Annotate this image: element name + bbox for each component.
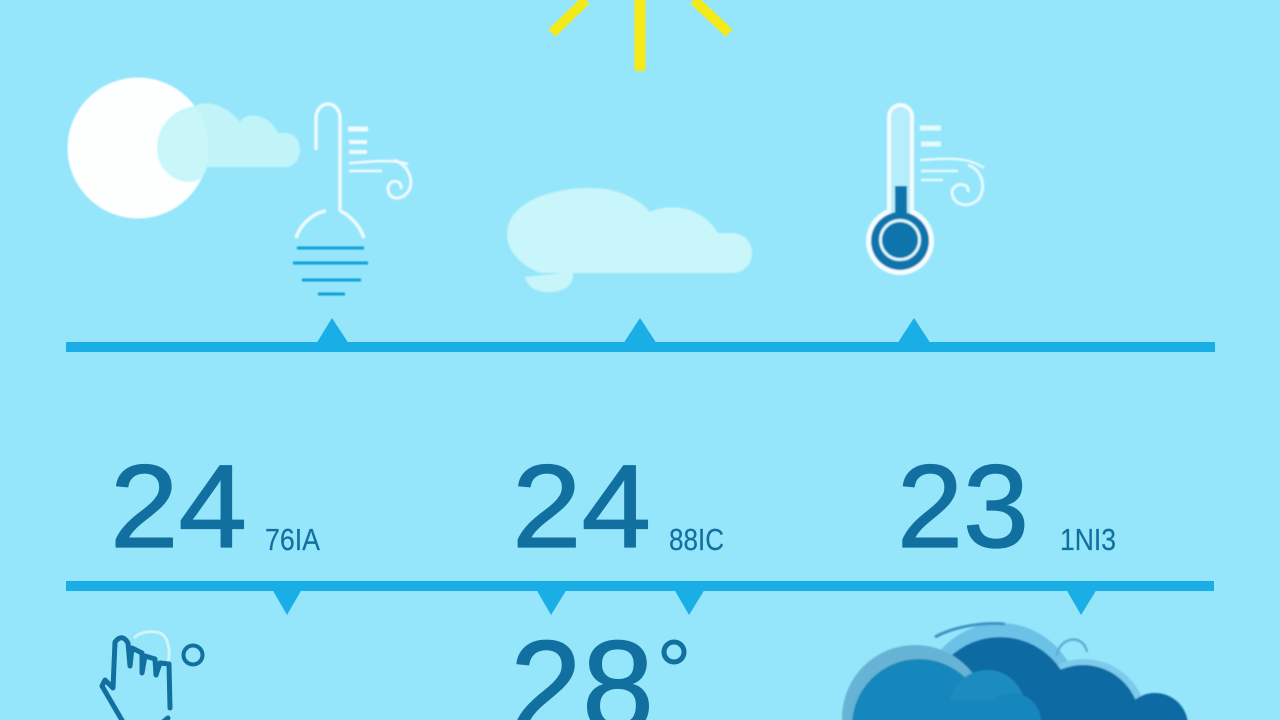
reading: 23 with label 1NI3 [897,441,1116,573]
reading: 24 with label 76IA: 76IA [265,522,320,557]
reading: 23 with label 1NI3: 1NI3 [1060,522,1116,557]
reading: 28 degrees [516,640,686,720]
icon: center cloud [507,188,752,292]
reading: 23 with label 1NI3: 23 [897,441,1029,573]
reading: 24 with label 88IC: 88IC [669,522,724,557]
upper axis with markers [66,318,1215,352]
reading: 24 with label 88IC [512,441,724,573]
icon: pointing hand with degree ring [102,632,202,720]
icon: dark storm cloud [842,623,1188,720]
reading: 24 with label 76IA: 24 [110,441,247,573]
reading: 24 with label 76IA [110,441,320,573]
icon: sun behind cloud [68,78,300,218]
lower axis with markers [66,581,1214,615]
reading: 24 with label 88IC: 24 [512,441,651,573]
icon: sun rays [552,0,729,71]
icon: filled thermometer with wind [866,105,984,275]
icon: thermometer with waves [293,104,411,294]
